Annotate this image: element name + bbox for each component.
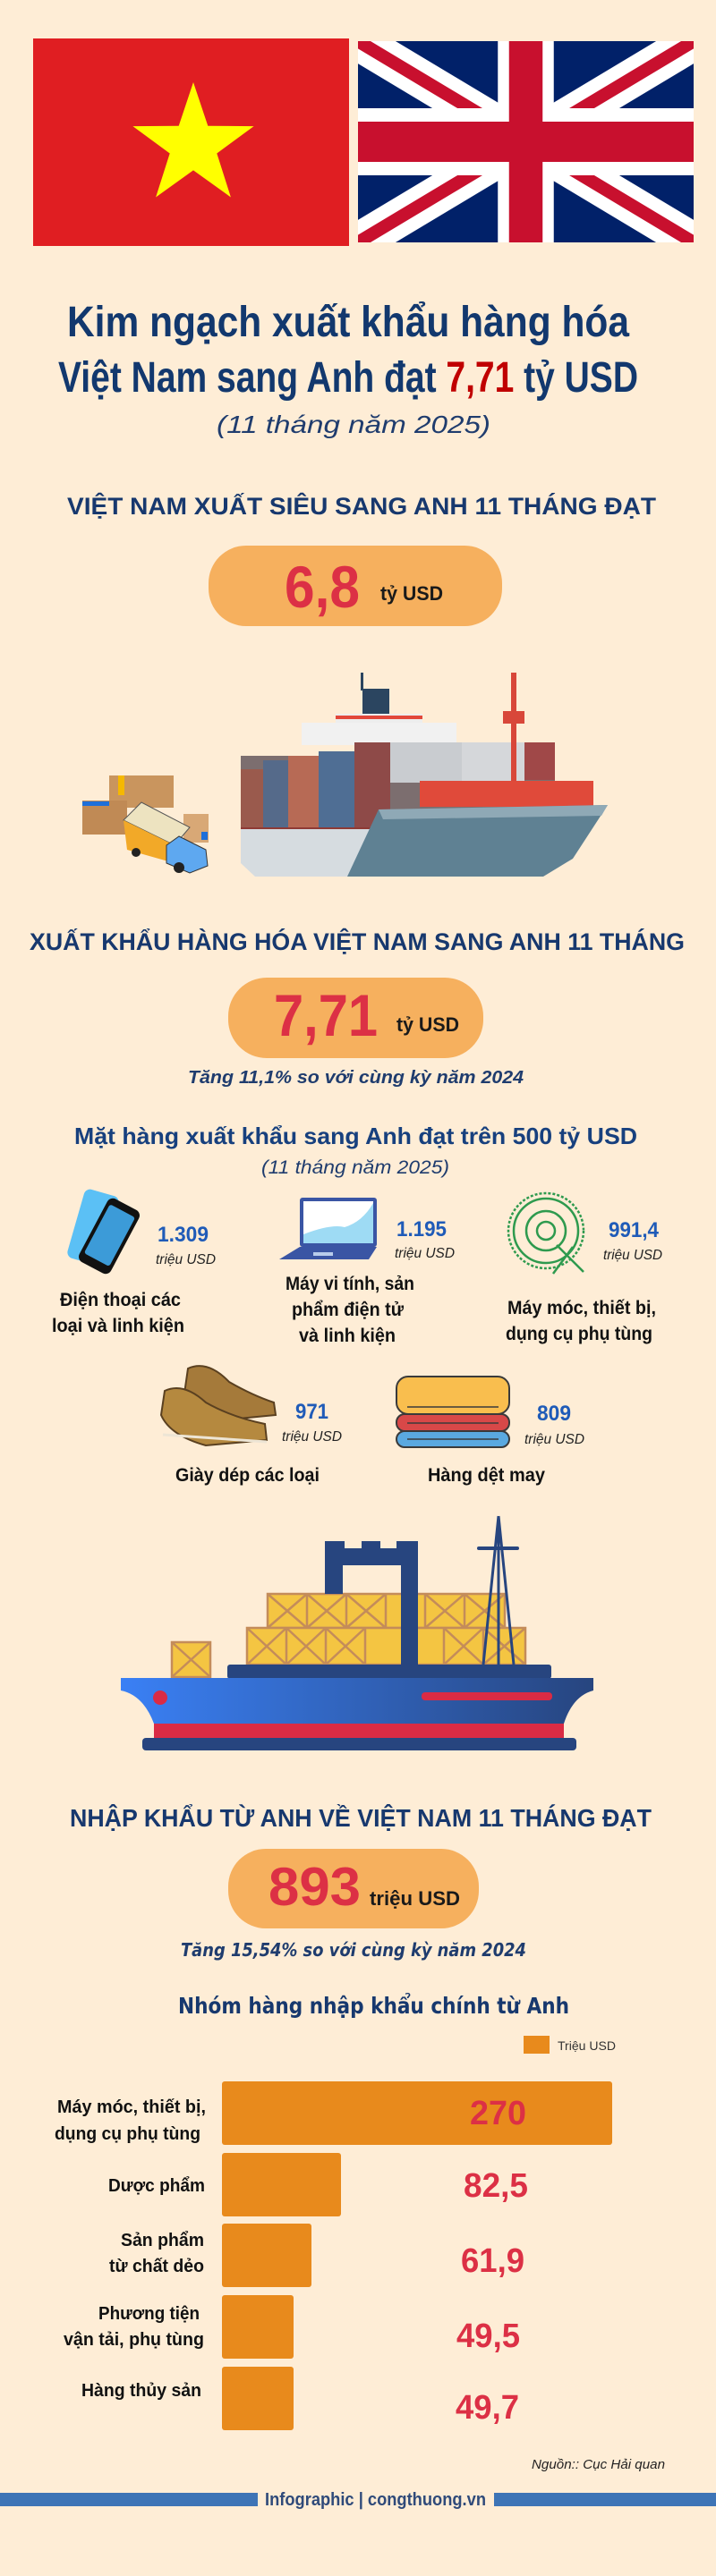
icon: laptop [279,1198,377,1259]
item: machinery: Máy móc, thiết bị, [507,1298,656,1318]
flag: Vietnam [33,38,349,246]
bar chart: import groups: 61,9 [461,2242,524,2280]
heading: main import groups: Nhóm hàng nhập khẩu chính từ Anh [178,1992,569,2019]
item: footwear: triệu USD [282,1429,342,1445]
icon: delivery truck with boxes [82,775,209,873]
item: machinery: triệu USD [603,1248,662,1263]
subtitle: period: (11 tháng năm 2025) [261,1157,449,1178]
callout: 893 triệu USD [228,1849,479,1928]
callout: 6,8 tỷ USD [209,546,502,626]
bar chart: import groups: Sản phẩm [121,2231,204,2250]
item: footwear: 971 [295,1400,328,1424]
bar chart: import groups: Phương tiện [98,2304,200,2324]
icon: phone [66,1188,141,1276]
bar chart: import groups: Dược phẩm [108,2176,205,2196]
bar chart: import groups: Hàng thủy sản [81,2381,201,2401]
callout: 7,71 tỷ USD: 7,71 [274,982,378,1048]
heading: trade surplus: VIỆT NAM XUẤT SIÊU SANG ANH 11 THÁNG ĐẠT [67,492,657,520]
heading: imports: NHẬP KHẨU TỪ ANH VỀ VIỆT NAM 11 THÁNG ĐẠT [70,1804,652,1832]
text: growth 15,54%: Tăng 15,54% so với cùng kỳ năm 2024 [181,1939,526,1961]
text: growth 11,1%: Tăng 11,1% so với cùng kỳ năm 2024 [188,1068,524,1088]
bar chart: import groups: 82,5 [464,2167,528,2205]
item: computers [279,1198,455,1346]
illustration: cargo ship [121,1516,593,1750]
bar chart: import groups [55,2081,612,2430]
callout: 6,8 tỷ USD: 6,8 [285,554,360,620]
callout: 893 triệu USD: triệu USD [370,1887,460,1910]
callout: 6,8 tỷ USD: tỷ USD [380,582,443,605]
callout: 7,71 tỷ USD: tỷ USD [396,1013,459,1036]
callout: 7,71 tỷ USD [228,978,483,1058]
heading: key export items: Mặt hàng xuất khẩu sang Anh đạt trên 500 tỷ USD [74,1123,637,1149]
bar chart: import groups: 270 [470,2095,526,2132]
item: textiles: Hàng dệt may [428,1465,545,1486]
item: textiles: triệu USD [524,1432,584,1447]
item: computers: Máy vi tính, sản [286,1274,414,1294]
source note: Nguồn:: Cục Hải quan [532,2457,665,2472]
item: phones: Điện thoại các [60,1290,181,1310]
item: computers: phẩm điện tử [292,1300,405,1320]
footer: Infographic | congthuong.vn [265,2490,486,2510]
bar chart: import groups: 49,5 [456,2318,520,2355]
callout: 893 triệu USD: 893 [268,1857,361,1917]
item: machinery: dụng cụ phụ tùng [506,1324,652,1344]
legend [524,2036,616,2054]
item: computers: và linh kiện [299,1326,396,1346]
heading: exports: XUẤT KHẨU HÀNG HÓA VIỆT NAM SANG ANH 11 THÁNG [30,928,685,955]
item: machinery: 991,4 [609,1218,660,1242]
item: phones: 1.309 [158,1223,209,1247]
title: Việt Nam sang Anh đạt 7,71 tỷ USD [58,354,638,402]
subtitle: (11 tháng năm 2025) [217,411,490,438]
bar chart: import groups: Máy móc, thiết bị, [57,2097,206,2117]
bar chart: import groups: từ chất dẻo [109,2257,204,2276]
footer [0,2490,716,2510]
illustration: container ship [241,673,608,877]
item: footwear [161,1366,342,1486]
title [58,299,638,402]
item: machinery [506,1193,662,1344]
bar chart: import groups: dụng cụ phụ tùng [55,2124,200,2144]
item: phones: triệu USD [156,1252,216,1267]
icon: shoes [161,1366,276,1445]
item: phones: loại và linh kiện [52,1316,184,1336]
legend: Triệu USD [558,2038,616,2053]
icon: gear and wrench [508,1193,584,1274]
flag: United Kingdom [358,41,694,242]
item: computers: 1.195 [396,1217,447,1241]
item: computers: triệu USD [395,1246,455,1261]
bar chart: import groups: 49,7 [456,2389,519,2427]
item: phones [52,1188,216,1336]
item: textiles: 809 [537,1402,571,1426]
item: footwear: Giày dép các loại [175,1465,320,1486]
title: Kim ngạch xuất khẩu hàng hóa [67,299,629,346]
icon: folded fabrics [396,1377,509,1447]
bar chart: import groups: vận tải, phụ tùng [64,2330,204,2350]
item: textiles [396,1377,584,1486]
